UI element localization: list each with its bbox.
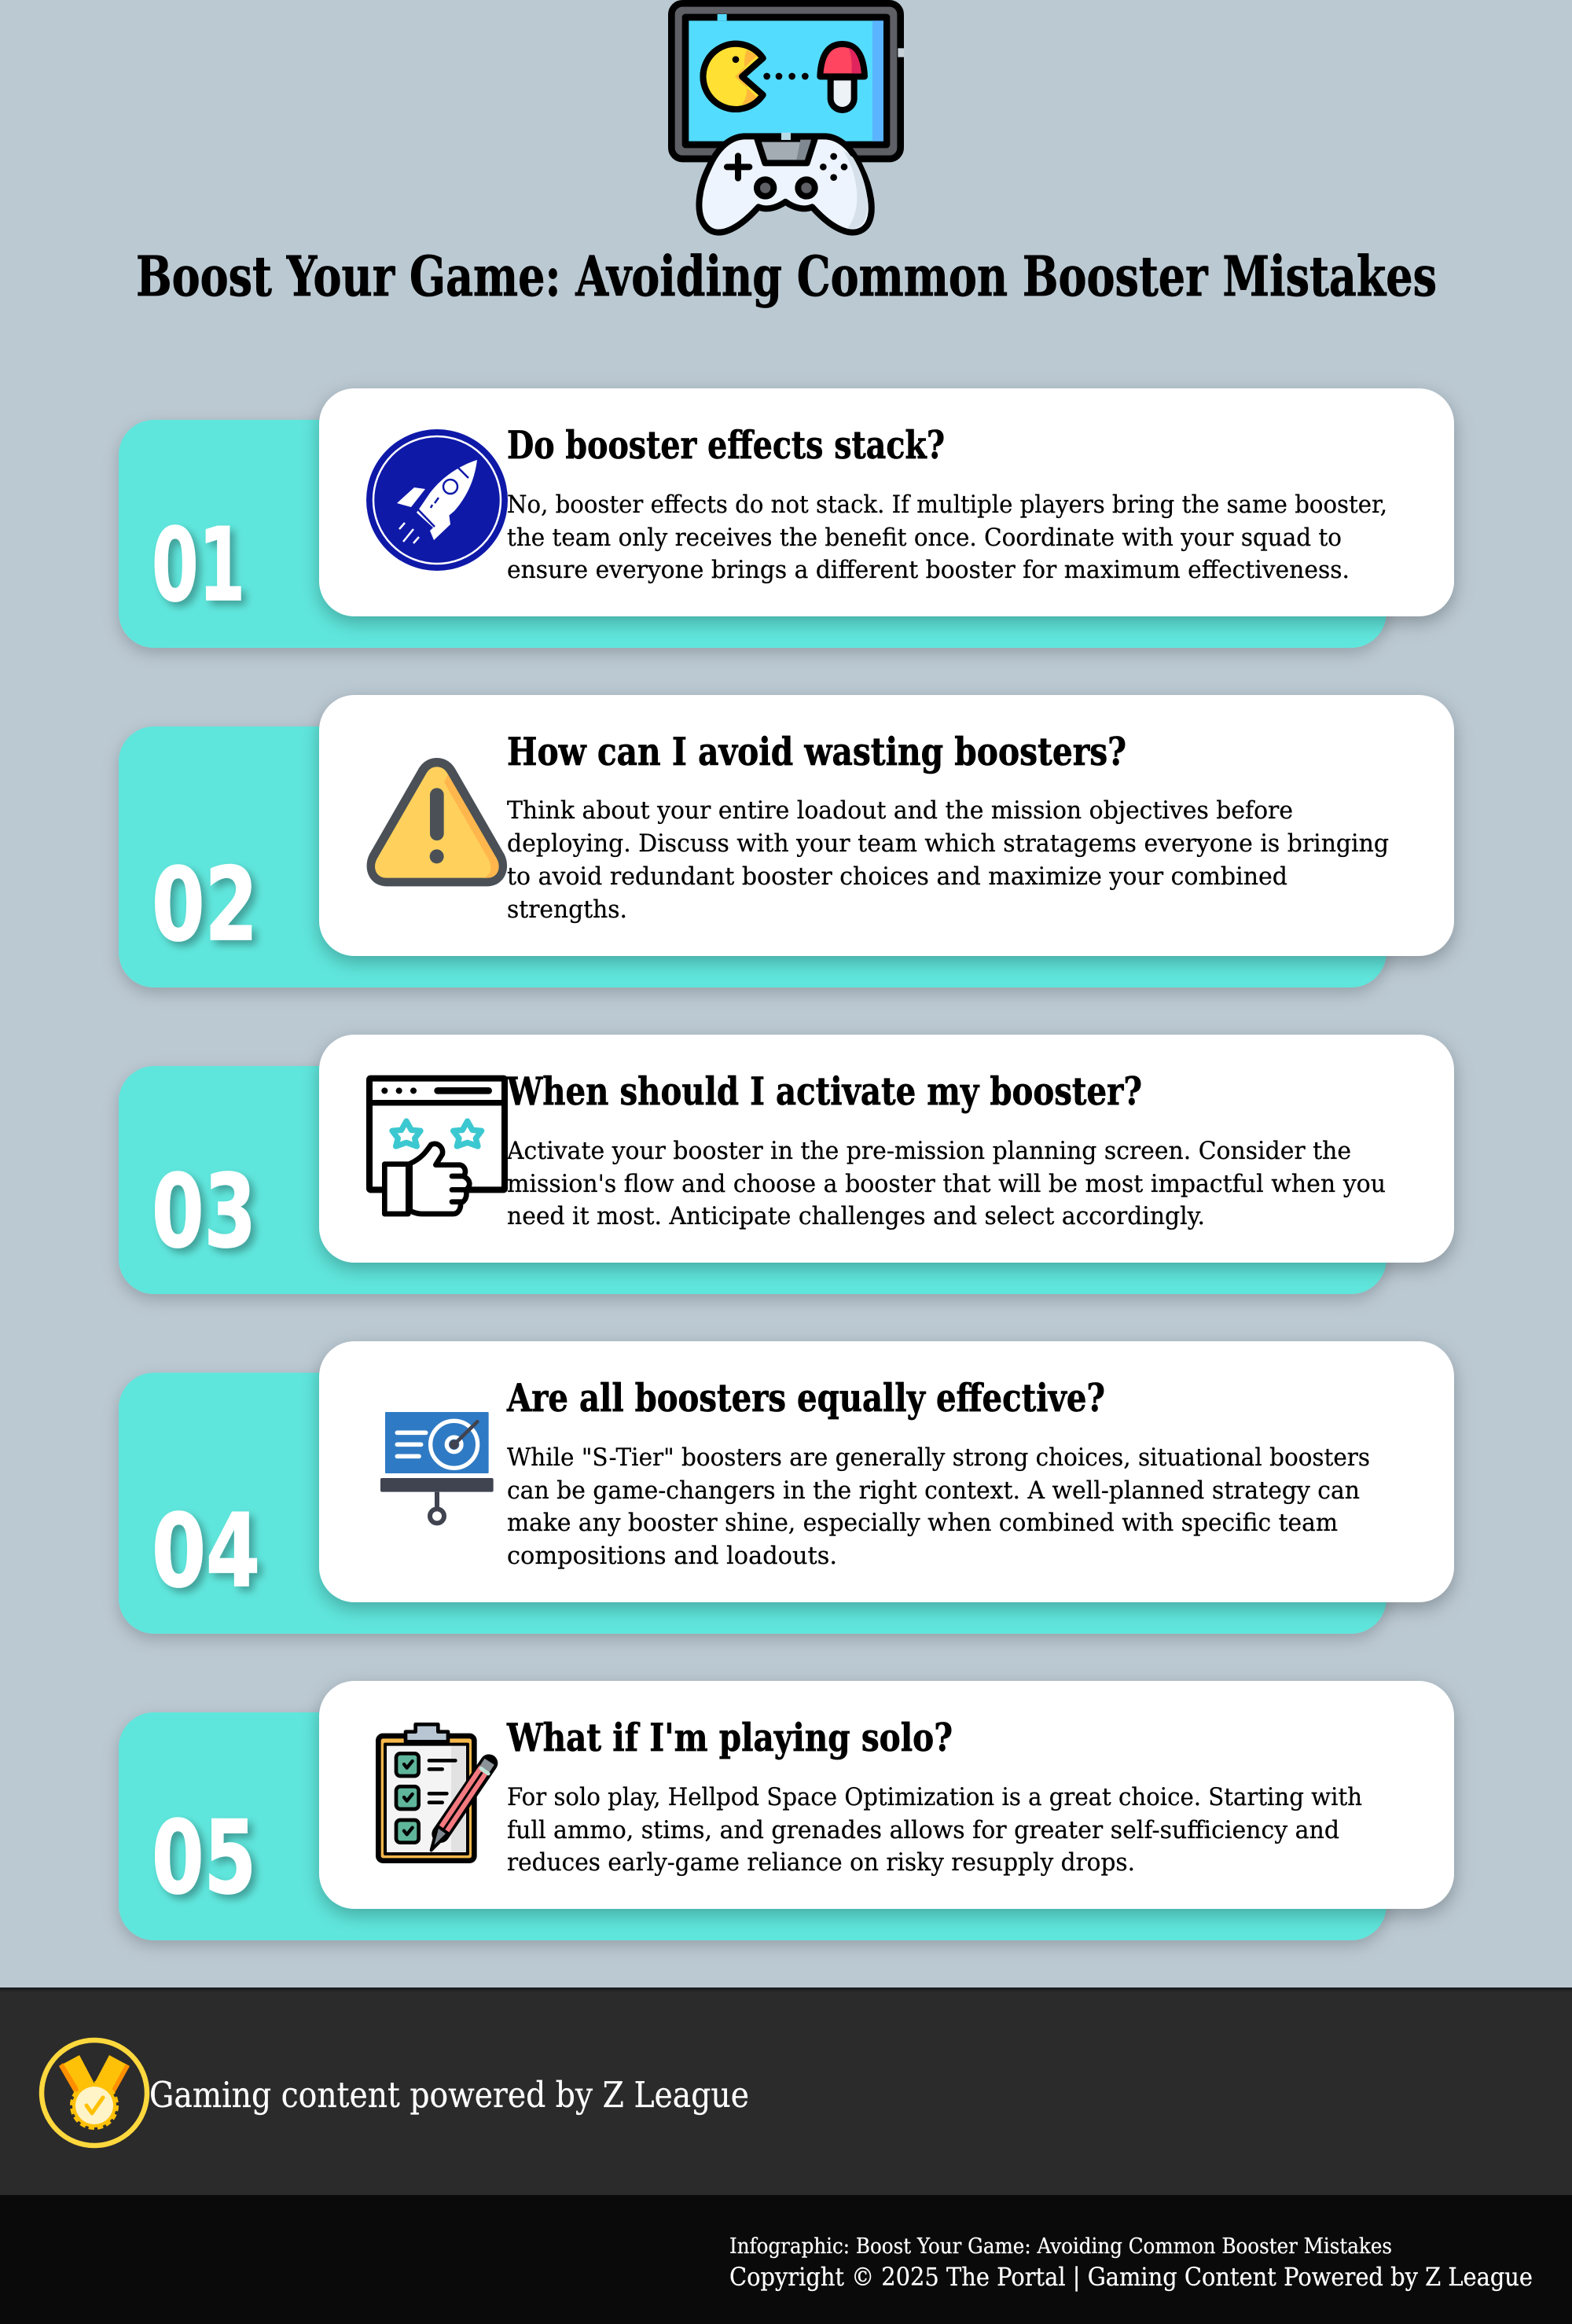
text 01: ensure everyone brings a different booster for maximum effectiveness. xyxy=(507,557,1350,584)
number 02: 02 xyxy=(152,847,258,964)
text 02: strengths. xyxy=(507,896,627,924)
panel: item 05 xyxy=(119,1681,1454,1940)
card 04 xyxy=(319,1341,1454,1602)
icon: warning triangle xyxy=(367,758,507,886)
panel: item 04 xyxy=(119,1341,1454,1634)
text 01 xyxy=(507,491,1387,584)
heading 01: Do booster effects stack? xyxy=(507,422,945,468)
text 02: to avoid redundant booster choices and maximize your combined xyxy=(507,863,1287,891)
number tab 01 xyxy=(119,420,1387,648)
text 05 xyxy=(507,1784,1362,1877)
number 01: 01 xyxy=(152,507,245,624)
text 05: For solo play, Hellpod Space Optimization is a great choice. Starting with xyxy=(507,1784,1362,1811)
text 04: can be game-changers in the right context. A well-planned strategy can xyxy=(507,1477,1360,1505)
number tab 04 xyxy=(119,1373,1387,1634)
text 03: need it most. Anticipate challenges and select accordingly. xyxy=(507,1203,1205,1230)
number 04: 04 xyxy=(152,1493,260,1610)
text 03: mission's flow and choose a booster that will be most impactful when you xyxy=(507,1171,1386,1198)
number tab 02 xyxy=(119,726,1387,987)
number tab 03 xyxy=(119,1066,1387,1294)
text 03: Activate your booster in the pre-mission planning screen. Consider the xyxy=(506,1138,1351,1165)
text 05: reduces early-game reliance on risky resupply drops. xyxy=(507,1849,1135,1877)
heading 04: Are all boosters equally effective? xyxy=(506,1375,1105,1421)
panel: copyright footer xyxy=(0,2195,1572,2324)
text 02: Think about your entire loadout and the mission objectives before xyxy=(507,797,1293,825)
text 04: make any booster shine, especially when combined with specific team xyxy=(507,1509,1338,1537)
panel: item 03 xyxy=(119,1035,1454,1294)
text 02 xyxy=(507,797,1389,924)
text 04: While "S-Tier" boosters are generally strong choices, situational boosters xyxy=(507,1444,1370,1472)
panel: item 01 xyxy=(119,388,1454,648)
heading 02: How can I avoid wasting boosters? xyxy=(507,729,1126,774)
card 05 xyxy=(319,1681,1454,1909)
number tab 05 xyxy=(119,1712,1387,1940)
number 05: 05 xyxy=(152,1800,256,1917)
icon: medal xyxy=(42,2040,147,2146)
sponsor text: Gaming content powered by Z League xyxy=(149,2074,749,2116)
heading 05: What if I'm playing solo? xyxy=(506,1715,953,1760)
text 02: deploying. Discuss with your team which stratagems everyone is bringing xyxy=(507,830,1389,858)
panel: sponsor band xyxy=(0,1988,1572,2195)
text 01: No, booster effects do not stack. If multiple players bring the same booster, xyxy=(507,491,1387,519)
icon: rocket xyxy=(366,429,508,571)
icon: clipboard and pencil xyxy=(378,1724,490,1861)
text 01: the team only receives the benefit once. Coordinate with your squad to xyxy=(507,524,1342,552)
text 04: compositions and loadouts. xyxy=(507,1543,837,1570)
text 03 xyxy=(506,1138,1386,1230)
heading 03: When should I activate my booster? xyxy=(506,1068,1142,1114)
card 01 xyxy=(319,388,1454,616)
icon: thumbs up in browser window xyxy=(369,1079,505,1214)
footer line 1: Infographic: Boost Your Game: Avoiding Common Booster Mistakes xyxy=(729,2234,1392,2259)
text 05: full ammo, stims, and grenades allows for greater self-sufficiency and xyxy=(507,1817,1339,1844)
text 04 xyxy=(507,1444,1370,1570)
card 02 xyxy=(319,695,1454,956)
icon: presentation target xyxy=(380,1412,494,1523)
number 03: 03 xyxy=(152,1153,256,1270)
icon: game monitor and controller xyxy=(671,3,904,233)
card 03 xyxy=(319,1035,1454,1263)
panel: item 02 xyxy=(119,695,1454,987)
